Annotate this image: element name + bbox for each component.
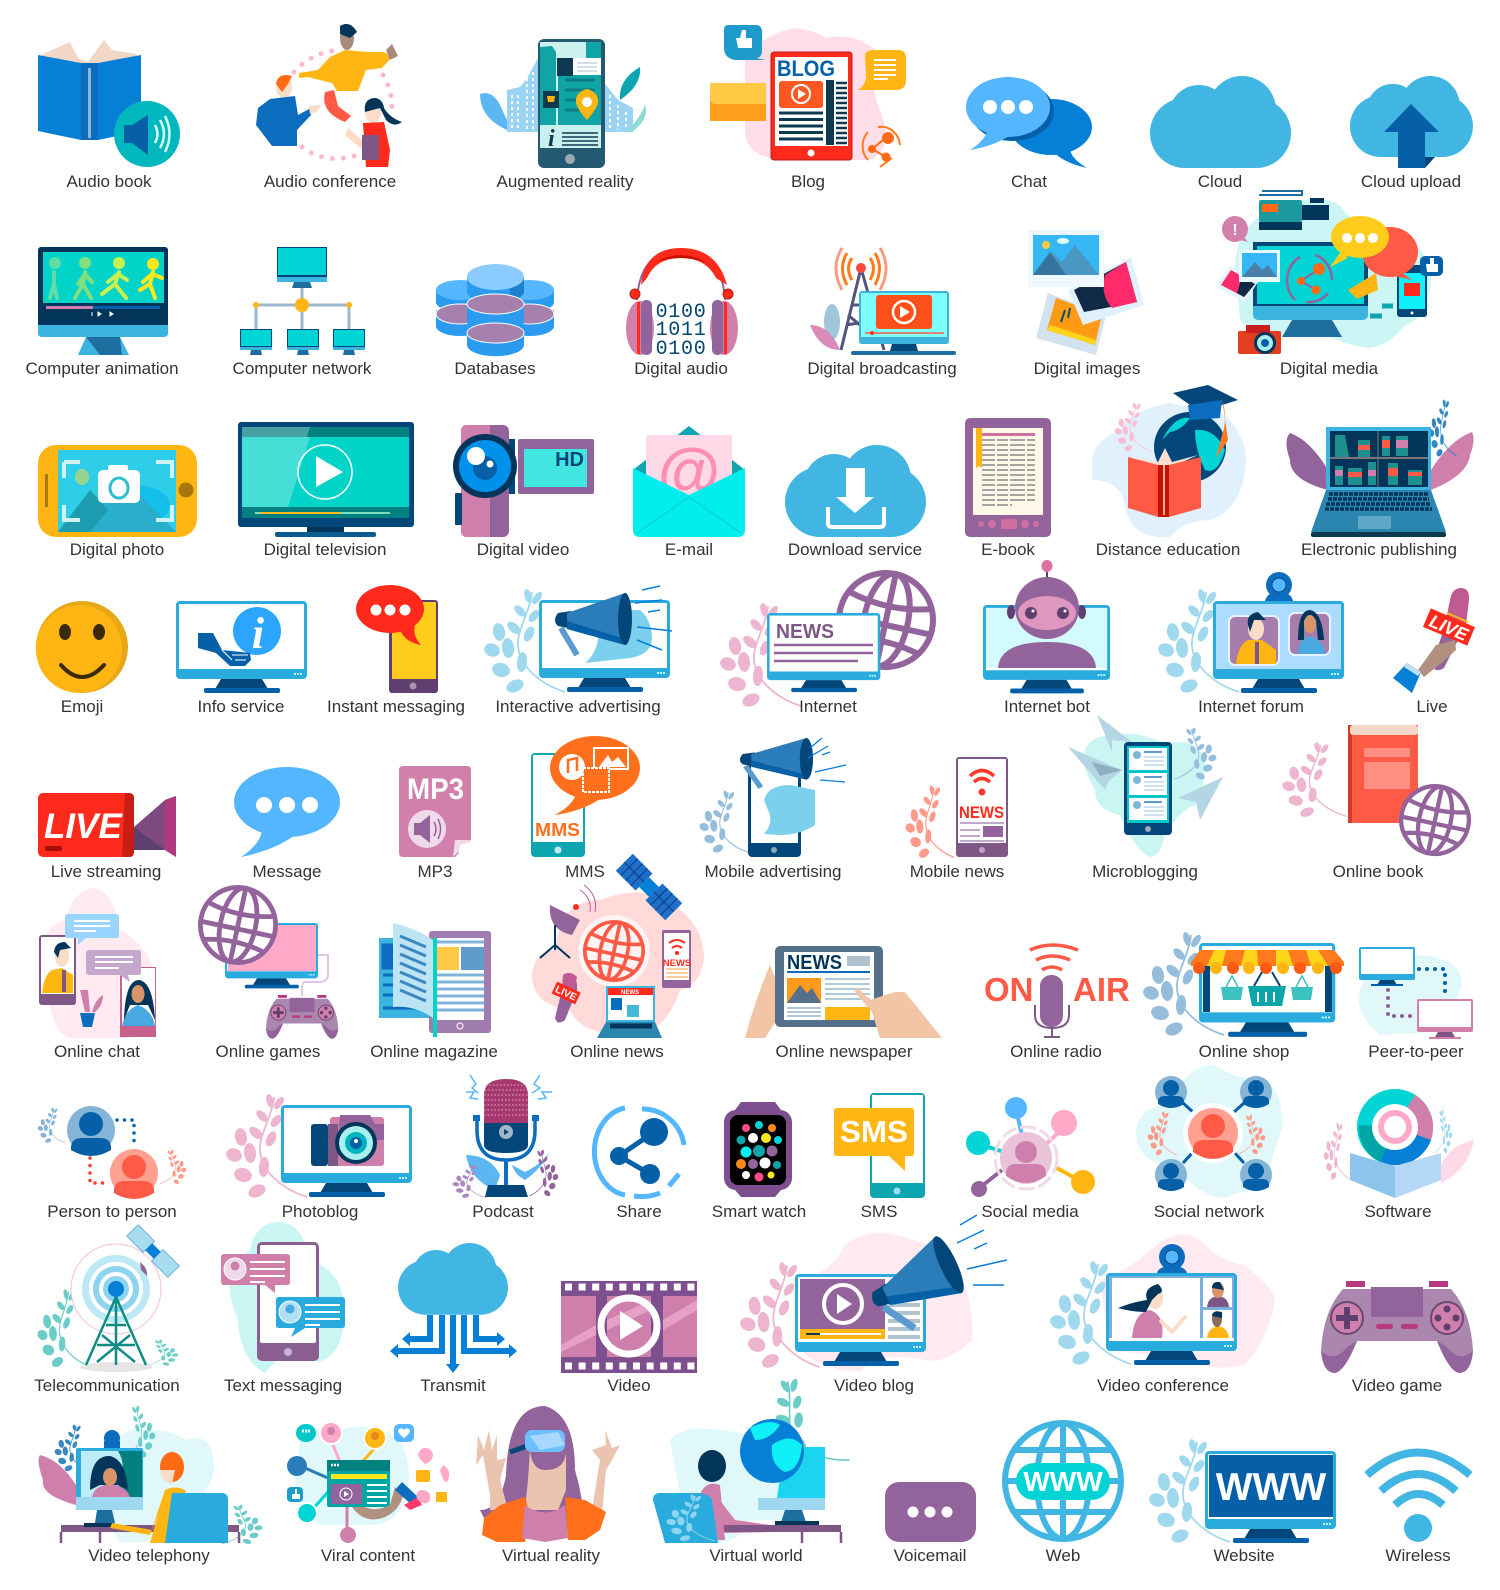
icon: sms: SMS [840, 1114, 908, 1149]
label: Info service [198, 697, 284, 716]
icon: digital photo [38, 445, 197, 537]
label: Social media [981, 1202, 1079, 1221]
icon: virtual reality [476, 1406, 620, 1542]
label: Databases [454, 359, 536, 378]
label: Online newspaper [775, 1042, 913, 1061]
icon: video [561, 1281, 697, 1373]
label: Digital television [264, 540, 386, 559]
label: Virtual world [709, 1546, 803, 1565]
label: Online news [570, 1042, 664, 1061]
icon: audio conference [256, 24, 402, 167]
label: Digital audio [634, 359, 728, 378]
icon: online news: LIVE [553, 984, 578, 1004]
icon: distance education [1092, 385, 1246, 537]
label: Internet forum [1198, 697, 1304, 716]
label: Wireless [1385, 1546, 1451, 1565]
label: Audio book [66, 172, 152, 191]
icon: mms: MMS [535, 820, 580, 840]
label: Software [1364, 1202, 1432, 1221]
icon: online newspaper: NEWS [787, 952, 842, 974]
icon: cloud upload [1350, 76, 1473, 168]
icon: digital audio: 0100 [656, 338, 706, 361]
label: Digital images [1034, 359, 1140, 378]
icon: online magazine [379, 923, 491, 1037]
label: Mobile advertising [704, 862, 842, 881]
icon: electronic publishing [1286, 399, 1474, 537]
icon: mp3: MP3 [407, 773, 464, 806]
label: Download service [788, 540, 922, 559]
label: Distance education [1096, 540, 1240, 559]
icon: computer animation [38, 247, 168, 355]
label: Transmit [420, 1376, 486, 1395]
label: Digital video [477, 540, 569, 559]
icon: software [1323, 1089, 1474, 1198]
label: Online shop [1199, 1042, 1289, 1061]
label: MMS [565, 862, 605, 881]
icon: chat [966, 77, 1092, 168]
label: Digital photo [70, 540, 164, 559]
icon: digital audio: 0100 [656, 301, 706, 324]
label: Computer network [233, 359, 372, 378]
icon: peer-to-peer [1359, 947, 1473, 1039]
icon: instant messaging [356, 585, 438, 693]
icon: web [1005, 1423, 1121, 1539]
label: Viral content [321, 1546, 415, 1565]
icon: internet forum [1156, 572, 1344, 695]
icon: online radio: ON [984, 971, 1034, 1008]
label: Photoblog [282, 1202, 358, 1221]
icon: voicemail [885, 1482, 976, 1542]
icon: digital broadcasting [810, 248, 956, 355]
label: Mobile news [910, 862, 1004, 881]
icon: video blog [738, 1215, 1007, 1372]
icon: social network [1136, 1065, 1282, 1198]
icon: smart watch [724, 1102, 792, 1197]
icon: viral content [287, 1422, 449, 1543]
icon: emoji [36, 601, 128, 693]
label: Person to person [47, 1202, 177, 1221]
icon: live: LIVE [1426, 611, 1472, 645]
icon: mobile news: NEWS [959, 804, 1004, 822]
icon: live streaming [38, 793, 176, 857]
label: Live [1416, 697, 1448, 716]
label: E-book [981, 540, 1035, 559]
icon: live streaming: LIVE [44, 807, 123, 846]
label: Video game [1352, 1376, 1442, 1395]
label: Video conference [1097, 1376, 1229, 1395]
label: Video [607, 1376, 651, 1395]
icon: e-mail [633, 426, 745, 537]
label: Voicemail [894, 1546, 966, 1565]
icon: podcast [452, 1075, 559, 1199]
icon: digital video [453, 425, 594, 537]
icon: photoblog [224, 1093, 412, 1200]
icon: online news: NEWS [663, 958, 691, 969]
label: Video telephony [88, 1546, 210, 1565]
icon: wireless [1367, 1452, 1470, 1542]
icon: mobile news [904, 757, 1008, 860]
label: Interactive advertising [495, 697, 661, 716]
icon: online newspaper [745, 946, 942, 1038]
icon: online news: NEWS [621, 990, 639, 996]
label: Online games [216, 1042, 320, 1061]
icon: live [1393, 588, 1475, 693]
icon: mms [531, 736, 640, 857]
label: Video blog [834, 1376, 914, 1395]
icon: online radio: AIR [1073, 971, 1130, 1008]
label: Virtual reality [502, 1546, 600, 1565]
icon: audio book [38, 40, 180, 167]
icon: info service [176, 601, 307, 693]
icon: online shop [1141, 931, 1344, 1038]
label: Emoji [61, 697, 103, 716]
icon: digital television [238, 422, 414, 537]
label: Instant messaging [327, 697, 465, 716]
label: Social network [1154, 1202, 1265, 1221]
label: Web [1046, 1546, 1080, 1565]
icon: digital video: HD [555, 449, 584, 471]
label: Internet bot [1004, 697, 1090, 716]
icon: website [1147, 1438, 1336, 1545]
icon: augmented reality: i [548, 126, 555, 152]
icon: databases [436, 264, 554, 356]
label: Smart watch [712, 1202, 806, 1221]
icon: sms [834, 1093, 925, 1198]
label: Online book [1333, 862, 1424, 881]
label: MP3 [418, 862, 452, 881]
label: Live streaming [51, 862, 161, 881]
icon: digital audio [626, 248, 738, 361]
icon: message [234, 767, 340, 857]
icon: online news [532, 854, 704, 1038]
label: E-mail [665, 540, 713, 559]
label: Chat [1011, 172, 1047, 191]
label: Online magazine [370, 1042, 498, 1061]
icon: text messaging [221, 1222, 345, 1373]
label: Augmented reality [496, 172, 634, 191]
icon: share [594, 1108, 684, 1197]
icon: video telephony [39, 1405, 263, 1545]
icon: online radio [984, 945, 1130, 1037]
label: Internet [799, 697, 857, 716]
label: Microblogging [1092, 862, 1198, 881]
icon: e-book [965, 418, 1051, 537]
label: Share [616, 1202, 662, 1221]
icon: internet [718, 564, 942, 709]
label: Message [253, 862, 321, 881]
label: Computer animation [25, 359, 179, 378]
icon: internet bot [983, 560, 1110, 693]
icon: mp3 [399, 766, 471, 857]
label: Cloud upload [1361, 172, 1461, 191]
icon: video game [1321, 1281, 1473, 1373]
icon: website: WWW [1216, 1466, 1326, 1509]
icon: internet: NEWS [776, 621, 834, 643]
icon: digital media: ! [1232, 222, 1238, 239]
label: Cloud [1198, 172, 1242, 191]
label: Digital media [1280, 359, 1379, 378]
label: Electronic publishing [1301, 540, 1457, 559]
icon: info service: i [252, 609, 265, 658]
icon: telecommunication [36, 1225, 179, 1372]
icon: video conference [1048, 1234, 1275, 1368]
icon: digital media [1216, 190, 1443, 354]
label: Telecommunication [34, 1376, 180, 1395]
icon: social media [966, 1097, 1095, 1197]
icon: computer network [240, 247, 365, 355]
icon: digital audio: 1011 [656, 319, 706, 342]
icon: online games [193, 880, 338, 1039]
label: Digital broadcasting [807, 359, 957, 378]
label: Podcast [472, 1202, 534, 1221]
label: Audio conference [264, 172, 396, 191]
label: SMS [861, 1202, 897, 1221]
icon: person to person [37, 1106, 187, 1199]
label: Peer-to-peer [1368, 1042, 1464, 1061]
label: Online chat [54, 1042, 140, 1061]
icon: e-mail: @ [658, 435, 720, 507]
icon: online book [1281, 725, 1475, 860]
label: Website [1213, 1546, 1275, 1565]
icon: augmented reality [480, 39, 646, 168]
icon: virtual world [653, 1368, 851, 1543]
icon: cloud [1150, 76, 1291, 168]
icon: download service [785, 445, 926, 537]
icon: transmit [390, 1243, 517, 1373]
icon: digital images [1028, 230, 1144, 355]
label: Online radio [1010, 1042, 1102, 1061]
label: Text messaging [224, 1376, 342, 1395]
icon: mobile advertising [698, 738, 846, 857]
icon: blog: BLOG [777, 56, 835, 81]
icon: web: WWW [1023, 1466, 1103, 1497]
icon: interactive advertising [482, 586, 672, 695]
icon: blog [710, 25, 906, 167]
label: Blog [791, 172, 825, 191]
icon: microblogging [1068, 715, 1223, 857]
icon: online chat [39, 888, 156, 1038]
